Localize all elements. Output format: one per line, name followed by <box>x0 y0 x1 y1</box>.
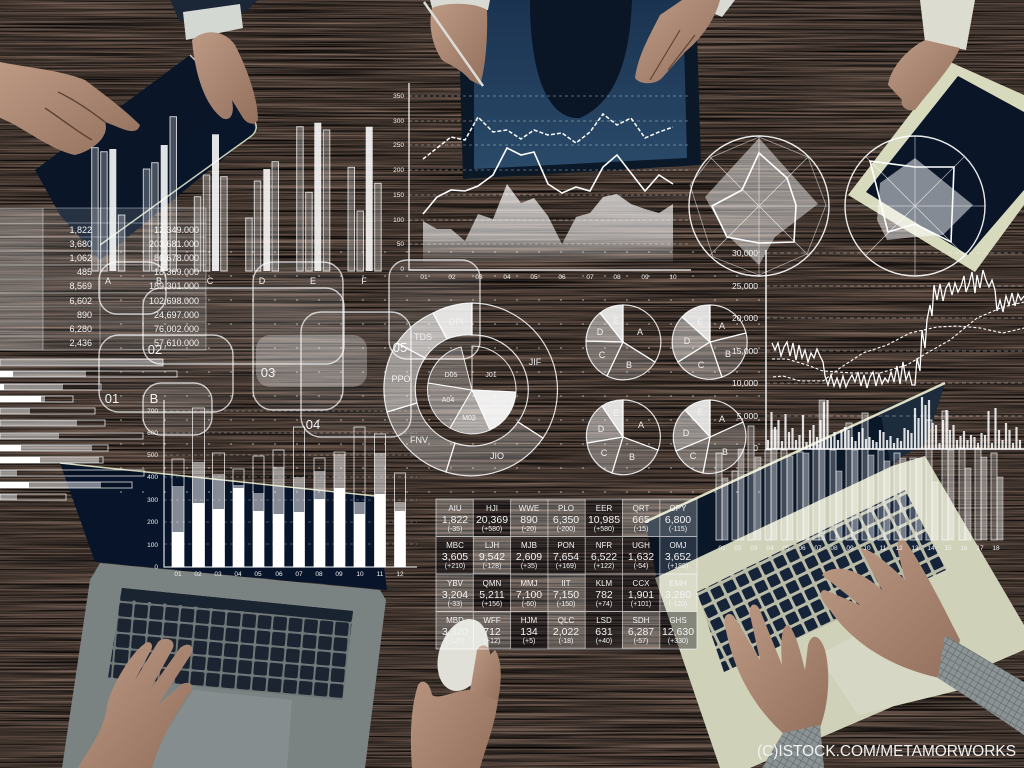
mid segments <box>172 453 406 532</box>
table row 2 <box>442 541 691 570</box>
x axis labels: 07 <box>586 274 594 281</box>
table column: left values: 2,436 <box>69 338 92 348</box>
table row 2: PON <box>557 541 575 550</box>
x axis labels: 06 <box>798 545 806 552</box>
x axis labels: 09 <box>641 274 649 281</box>
small pie chart 2 <box>672 305 747 379</box>
table row 2: (+35) <box>521 563 537 570</box>
tablet top left <box>35 55 258 260</box>
table column: left values: 485 <box>77 267 92 277</box>
table row 3: IIT <box>561 579 571 588</box>
table column: right values <box>149 225 199 348</box>
callout labels: B <box>150 391 158 406</box>
dashed line series <box>423 114 673 159</box>
volume bars <box>768 397 1020 449</box>
callout labels: 04 <box>306 417 320 432</box>
small pie chart 1: C <box>599 350 606 360</box>
table column: right values: 86,678.000 <box>154 253 199 263</box>
table row 4: WFF <box>483 616 501 625</box>
tablet top centre <box>458 0 701 179</box>
table row 2: 3,652 <box>665 551 691 563</box>
category labels: B <box>156 276 162 286</box>
table row 1: HJI <box>486 504 498 513</box>
table row 1: (-15) <box>634 526 648 533</box>
grouped bar chart top left <box>92 117 381 286</box>
x axis labels: 09 <box>846 545 854 552</box>
table row 1: 10,985 <box>588 514 620 526</box>
area series <box>423 184 673 262</box>
table row 3: (-120) <box>669 601 687 608</box>
table row 4: SDH <box>633 616 650 625</box>
small pie chart 2: C <box>698 360 705 370</box>
small pie chart 1 <box>586 305 661 380</box>
table row 3: EMH <box>669 579 687 588</box>
y axis labels: 0 <box>753 443 758 453</box>
y axis labels <box>732 248 758 453</box>
stacked bar chart bottom left <box>147 400 417 578</box>
category labels: D <box>259 276 266 286</box>
donut chart: A04 <box>442 397 454 404</box>
inner pie segments <box>428 346 516 434</box>
y axis labels <box>147 408 158 571</box>
x axis labels <box>174 571 404 578</box>
table column: right values: 18,369.000 <box>154 267 199 277</box>
x axis labels: 06 <box>275 571 283 578</box>
x axis labels: 01 <box>718 545 726 552</box>
y axis labels: 250 <box>393 142 404 149</box>
table row 1: 890 <box>520 514 538 526</box>
y axis labels: 15,000 <box>732 346 758 356</box>
category labels: F <box>361 276 367 286</box>
table row 3: 7,150 <box>553 589 579 601</box>
table column: right values: 76,002.000 <box>154 324 199 334</box>
table row 1: (+580) <box>594 526 614 533</box>
laptop left <box>60 463 387 768</box>
y axis labels: 400 <box>147 474 158 481</box>
table row 1: 665 <box>632 514 650 526</box>
small pie chart 1: A <box>637 327 643 337</box>
y axis labels: 25,000 <box>732 281 758 291</box>
table row 1: 6,350 <box>553 514 579 526</box>
table row 4: (+40) <box>596 638 612 645</box>
table row 2: LJH <box>485 541 499 550</box>
x axis labels: 08 <box>315 571 323 578</box>
table row 3: (+101) <box>631 601 651 608</box>
donut chart <box>384 303 557 476</box>
x axis labels: 03 <box>750 545 758 552</box>
small pie chart 2: E <box>697 317 703 327</box>
table row 2: OMJ <box>670 541 686 550</box>
donut chart: J01 <box>485 372 497 379</box>
laptop right <box>645 383 1024 768</box>
small pie chart 1: B <box>626 360 632 370</box>
table row 2: 6,522 <box>591 551 617 563</box>
table column: right values: 12,349.000 <box>154 225 199 235</box>
x axis labels: 01 <box>174 571 182 578</box>
solid line series <box>423 148 673 214</box>
table row 4: 6,287 <box>628 626 654 638</box>
table row 2: MBC <box>446 541 464 550</box>
y axis labels <box>393 93 404 273</box>
x axis labels: 07 <box>295 571 303 578</box>
table row 2: (+169) <box>556 563 576 570</box>
x axis labels: 05 <box>530 274 538 281</box>
axes <box>766 250 1024 449</box>
table column: left values: 8,569 <box>69 281 92 291</box>
small pie chart 3: A <box>638 420 644 430</box>
category labels <box>105 276 367 286</box>
dotted grid backdrop <box>100 240 760 510</box>
category labels: C <box>207 276 214 286</box>
x axis labels: 08 <box>613 274 621 281</box>
donut labels <box>391 317 542 461</box>
table column: left values: 6,602 <box>69 296 92 306</box>
small pie chart 4 <box>673 400 746 473</box>
table row 3: 3,280 <box>665 589 691 601</box>
table row 1: 6,800 <box>665 514 691 526</box>
table row 4: (+5) <box>523 638 535 645</box>
top hands and sleeves <box>0 0 975 155</box>
table row 3: 3,204 <box>442 589 468 601</box>
table row 1: 20,369 <box>476 514 508 526</box>
x axis labels: 12 <box>396 571 404 578</box>
table row 2: 7,654 <box>553 551 579 563</box>
table row 1: (-115) <box>669 526 687 533</box>
x axis labels: 14 <box>927 545 935 552</box>
y axis labels: 700 <box>147 408 158 415</box>
y axis labels: 0 <box>400 266 404 273</box>
y axis labels: 10,000 <box>732 378 758 388</box>
y axis labels: 50 <box>397 241 404 248</box>
table row 4: 631 <box>595 626 613 638</box>
x axis labels: 10 <box>863 545 871 552</box>
x axis labels: 04 <box>766 545 774 552</box>
rounded callout boxes <box>99 260 480 437</box>
table row 4: (-120) <box>446 638 464 645</box>
x axis labels: 05 <box>782 545 790 552</box>
table row 1: QRT <box>633 504 649 513</box>
table row 2: MJB <box>521 541 537 550</box>
donut labels: TDS <box>414 332 432 342</box>
x axis labels: 03 <box>214 571 222 578</box>
table row 1: (-200) <box>557 526 575 533</box>
table row 2: UGH <box>632 541 650 550</box>
x axis labels: 10 <box>356 571 364 578</box>
table row 4: (-57) <box>634 638 648 645</box>
table row 3: (+74) <box>596 601 612 608</box>
table column: left values <box>69 225 92 348</box>
table row 4: QLC <box>558 616 574 625</box>
category labels: E <box>310 276 316 286</box>
table column: left values: 3,680 <box>69 239 92 249</box>
x axis labels: 02 <box>194 571 202 578</box>
callout labels: 03 <box>261 365 275 380</box>
callout labels: 05 <box>393 340 407 355</box>
table column: right values: 102,698.000 <box>149 296 199 306</box>
small pie chart 3 <box>586 400 660 475</box>
y axis labels: 600 <box>147 430 158 437</box>
table row 1: OPY <box>670 504 687 513</box>
x axis labels <box>718 545 1000 552</box>
left data table <box>0 208 206 350</box>
table column: left values: 6,280 <box>69 324 92 334</box>
table row 3: (+156) <box>482 601 502 608</box>
donut labels: OPI <box>448 317 464 327</box>
donut chart: D05 <box>445 372 458 379</box>
table row 1: (-35) <box>448 526 462 533</box>
x axis labels: 11 <box>880 545 887 552</box>
y axis labels: 200 <box>147 519 158 526</box>
y axis labels: 100 <box>393 217 404 224</box>
table row 2: NFR <box>596 541 612 550</box>
donut chart: K02 <box>494 402 506 409</box>
table row 3: 782 <box>595 589 613 601</box>
small pie chart 3: B <box>629 452 635 462</box>
x axis labels: 07 <box>814 545 822 552</box>
x axis labels: 11 <box>377 571 384 578</box>
table row 3 <box>442 579 691 608</box>
y axis labels: 150 <box>393 192 404 199</box>
y axis labels: 20,000 <box>732 313 758 323</box>
table row 4: 2,022 <box>553 626 579 638</box>
y axis labels: 0 <box>154 564 158 571</box>
table row 3: (-33) <box>448 601 462 608</box>
table row 3: 7,100 <box>516 589 542 601</box>
y axis labels: 300 <box>147 497 158 504</box>
table column: right values: 57,610.000 <box>154 338 199 348</box>
x axis labels: 02 <box>448 274 456 281</box>
table row 4: (+330) <box>668 638 688 645</box>
table row 1: PLO <box>558 504 574 513</box>
small pie chart 2: A <box>719 321 725 331</box>
table row 2: 3,605 <box>442 551 468 563</box>
callout labels: 01 <box>105 391 119 406</box>
y axis labels: 5,000 <box>737 411 758 421</box>
donut chart: M03 <box>462 415 476 422</box>
small pie chart 2: D <box>684 336 691 346</box>
table row 4: (-18) <box>559 638 573 645</box>
x axis labels: 08 <box>830 545 838 552</box>
solid segments <box>172 488 406 567</box>
y axis labels: 300 <box>393 118 404 125</box>
table column: left values: 1,822 <box>69 225 92 235</box>
line chart top centre <box>393 83 691 281</box>
table row 1 <box>442 504 691 533</box>
table row 4: LSD <box>596 616 612 625</box>
x axis labels: 04 <box>234 571 242 578</box>
table row 3: 1,901 <box>628 589 654 601</box>
table column: right values: 189,301.000 <box>149 281 199 291</box>
y axis labels: 350 <box>393 93 404 100</box>
small pie chart 4: D <box>683 428 690 438</box>
paired bar chart bottom right <box>716 400 1003 552</box>
small pie chart 1: E <box>613 316 619 326</box>
horizontal bar chart <box>0 359 177 500</box>
x axis labels: 02 <box>734 545 742 552</box>
right time series chart <box>732 248 1024 453</box>
table row 2: (-128) <box>483 563 501 570</box>
small pie chart 3: E <box>613 408 619 418</box>
x axis labels <box>420 274 677 281</box>
table row 3: MMJ <box>520 579 538 588</box>
table row 2: (+188) <box>668 563 688 570</box>
donut labels: JIO <box>490 451 504 461</box>
table row 4 <box>442 616 694 645</box>
x axis labels: 04 <box>503 274 511 281</box>
x axis labels: 13 <box>911 545 919 552</box>
tablet top right <box>848 62 1024 272</box>
radar chart 2 <box>845 136 985 276</box>
x axis labels: 12 <box>895 545 903 552</box>
noisy price line <box>772 270 1024 388</box>
table row 1: WWE <box>519 504 539 513</box>
table row 1: 1,822 <box>442 514 468 526</box>
table row 2: (-54) <box>634 563 648 570</box>
y axis labels: 200 <box>393 167 404 174</box>
table row 3: KLM <box>596 579 613 588</box>
table column: left values: 890 <box>77 310 92 320</box>
table row 1: (+580) <box>482 526 502 533</box>
donut labels: JIF <box>529 357 542 367</box>
table column: right values: 24,697.000 <box>154 310 199 320</box>
axes <box>164 400 417 567</box>
table row 4: (+12) <box>484 638 500 645</box>
table cells <box>436 499 697 649</box>
donut labels: PPO <box>391 374 411 384</box>
dashed trend lines <box>772 302 1024 373</box>
small pie chart 4: E <box>697 407 703 417</box>
callout labels <box>105 340 407 432</box>
radar chart 1 <box>689 136 829 276</box>
small pie chart 3: C <box>601 448 608 458</box>
small pie chart 1: D <box>597 327 604 337</box>
donut labels: FNV <box>410 435 428 445</box>
x axis labels: 06 <box>558 274 566 281</box>
axes <box>409 83 691 270</box>
table row 3: 5,211 <box>479 589 505 601</box>
table row 2: (+122) <box>594 563 614 570</box>
table row 2: 1,632 <box>628 551 654 563</box>
x axis labels: 17 <box>976 545 984 552</box>
small pie chart 3: D <box>598 424 605 434</box>
table row 2: 9,542 <box>479 551 505 563</box>
category labels: A <box>105 276 111 286</box>
table row 4: GHS <box>669 616 687 625</box>
table row 4: 3,320 <box>442 626 468 638</box>
x axis labels: 16 <box>960 545 968 552</box>
y axis labels: 100 <box>147 542 158 549</box>
table row 4: 712 <box>483 626 501 638</box>
bottom hands, mouse and sleeves <box>78 539 1024 768</box>
table row 4: 12,630 <box>662 626 694 638</box>
stock table <box>436 499 697 649</box>
table column: left values: 1,062 <box>69 253 92 263</box>
x axis labels: 10 <box>669 274 677 281</box>
table row 3: (-150) <box>557 601 575 608</box>
outer band segments <box>384 303 557 476</box>
y axis labels: 500 <box>147 452 158 459</box>
table row 1: AIU <box>448 504 462 513</box>
callout labels: 02 <box>148 342 162 357</box>
small pie chart 4: A <box>719 414 725 424</box>
x axis labels: 15 <box>944 545 952 552</box>
table row 4: 134 <box>520 626 538 638</box>
table row 3: YBV <box>447 579 464 588</box>
small pie chart 4: B <box>722 447 728 457</box>
table row 3: (-60) <box>522 601 536 608</box>
x axis labels: 03 <box>475 274 483 281</box>
small pie chart 2: B <box>725 349 731 359</box>
table row 4: HJM <box>521 616 538 625</box>
x axis labels: 18 <box>992 545 1000 552</box>
photo credit: (C)ISTOCK.COM/METAMORWORKS <box>757 743 1016 760</box>
small pie chart 4: C <box>690 451 697 461</box>
bar outlines <box>172 408 406 567</box>
table row 1: EER <box>596 504 612 513</box>
table row 3: QMN <box>483 579 502 588</box>
y axis labels: 30,000 <box>732 248 758 258</box>
x axis labels: 09 <box>335 571 343 578</box>
table row 4: MBD <box>446 616 464 625</box>
table row 1: (-20) <box>522 526 536 533</box>
table row 2: (+210) <box>445 563 465 570</box>
table row 2: 2,609 <box>516 551 542 563</box>
table column: right values: 203,681.000 <box>149 239 199 249</box>
x axis labels: 05 <box>254 571 262 578</box>
table row 3: CCX <box>633 579 650 588</box>
x axis labels: 01 <box>420 274 428 281</box>
